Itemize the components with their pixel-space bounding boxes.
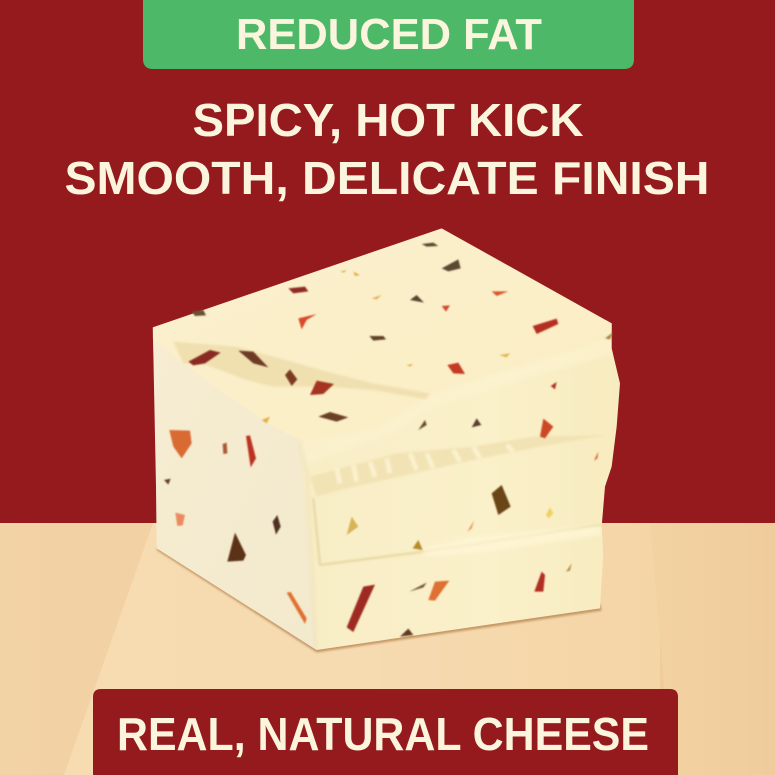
cheese bright band — [561, 336, 613, 364]
wooden table surface — [0, 523, 775, 775]
green banner: reduced fat — [143, 0, 634, 69]
cheese right face — [290, 320, 630, 660]
cheese left face — [150, 333, 317, 653]
cheese torn ledge — [310, 435, 608, 497]
cheese faces — [150, 227, 630, 660]
headline: SPICY, HOT KICK — [192, 94, 584, 146]
cheese vertical edge — [299, 442, 317, 650]
cheese block illustration — [150, 227, 630, 660]
red background — [0, 0, 775, 523]
cheese ledge lines — [313, 498, 602, 565]
headline: SMOOTH, DELICATE FINISH — [64, 152, 710, 204]
cheese top face — [150, 227, 613, 440]
cheese top groove — [173, 342, 430, 399]
red banner: real, natural cheese: REAL, NATURAL CHEESE — [117, 708, 649, 760]
cheese contact shadow — [157, 543, 602, 652]
red banner: real, natural cheese — [93, 689, 678, 775]
pepper flakes — [164, 243, 613, 637]
green banner: reduced fat: REDUCED FAT — [236, 10, 542, 59]
headline — [64, 94, 710, 204]
